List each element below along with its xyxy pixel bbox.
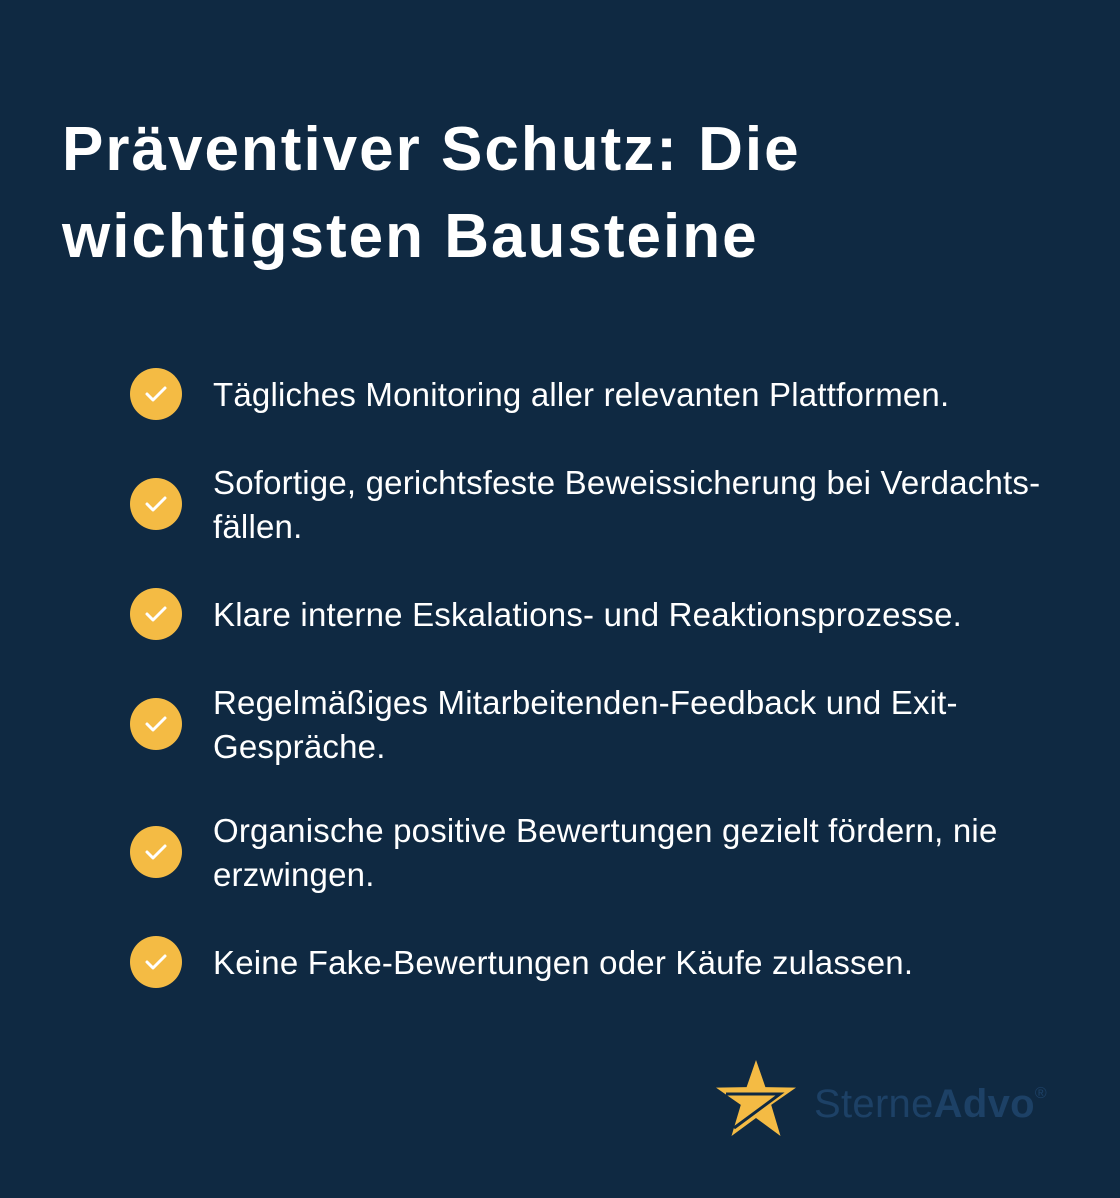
logo text: SterneAdvo® (814, 1082, 1047, 1126)
item 5: Organische positive Bewertungen gezielt fördern, nie (213, 812, 998, 849)
item 4 (130, 684, 958, 765)
item 4: Gespräche. (213, 728, 386, 765)
item 1 (130, 368, 949, 420)
logo (716, 1060, 1047, 1136)
title: Präventiver Schutz: Die (62, 115, 801, 184)
item 2 (130, 464, 1040, 545)
item 6: Keine Fake-Bewertungen oder Käufe zulassen. (213, 944, 913, 981)
item 3: Klare interne Eskalations- und Reaktionsprozesse. (213, 596, 962, 633)
item 2: fällen. (213, 508, 302, 545)
item 6 (130, 936, 913, 988)
item 5 (130, 812, 998, 893)
item 1: Tägliches Monitoring aller relevanten Plattformen. (213, 376, 949, 413)
item 2: Sofortige, gerichtsfeste Beweissicherung bei Verdachts- (213, 464, 1040, 501)
title: wichtigsten Bausteine (62, 202, 759, 271)
item 3 (130, 588, 962, 640)
item 4: Regelmäßiges Mitarbeitenden-Feedback und Exit- (213, 684, 958, 721)
title (62, 115, 801, 271)
icon: star (716, 1060, 796, 1136)
item 5: erzwingen. (213, 856, 375, 893)
